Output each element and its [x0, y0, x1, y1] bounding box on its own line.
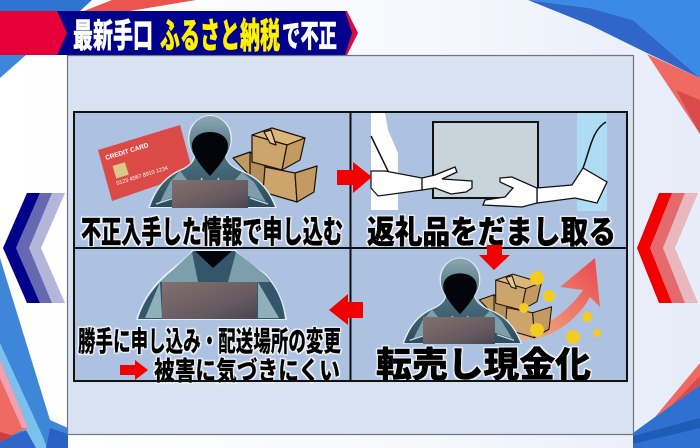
laptop (blurred): [423, 317, 495, 344]
icon: credit card: CREDIT CARD: [105, 142, 150, 162]
caption: 不正入手した情報で申し込む: [81, 215, 343, 250]
icon: yen coins: [519, 271, 601, 344]
background shapes: top right: [528, 0, 700, 134]
inline red arrow: [120, 360, 148, 380]
flow arrow: down: [479, 245, 510, 270]
icon: cardboard boxes: [233, 128, 317, 202]
caption: 転売し現金化: [376, 346, 591, 385]
icon: credit card: 0123 4567 8910 1234: [116, 166, 169, 187]
caption: 返礼品をだまし取る: [367, 214, 616, 250]
icon: cardboard boxes: [479, 274, 552, 338]
title text: yellow part: ふるさと納税: [160, 17, 280, 56]
background shapes: bottom right: [633, 363, 700, 448]
cell 4: unauthorized changes: [78, 250, 341, 386]
flow arrow: right: [337, 162, 372, 193]
cell 1: fraudulent application: [81, 115, 343, 250]
icon: hooded hacker: [148, 115, 277, 208]
title banner: [0, 11, 358, 56]
cell 2: trick return gift: [367, 113, 616, 250]
background shapes: bottom left: [0, 258, 68, 448]
left chevrons: [3, 193, 65, 303]
title text: end part: で不正: [282, 19, 337, 54]
cell 3: resale for cash: [376, 258, 601, 385]
laptop (blurred): [172, 180, 248, 208]
flow arrow: left: [329, 294, 363, 325]
icon: rising red arrow: [518, 258, 600, 339]
background shapes: top left: [0, 0, 196, 78]
laptop (blurred): [162, 282, 257, 319]
icon: hacker body: [136, 250, 287, 320]
title text: white part: 最新手口: [73, 17, 153, 54]
caption line 1: 勝手に申し込み・配送場所の変更: [78, 326, 341, 357]
caption line 2: 被害に気づきにくい: [154, 356, 340, 386]
illustration: parcel handover: [371, 113, 607, 211]
flow grid: [74, 112, 627, 386]
right chevrons: [637, 193, 698, 303]
main panel: [68, 56, 634, 434]
grid lines: [74, 112, 627, 381]
icon: hooded hacker: [402, 258, 522, 344]
icon: credit card: [98, 125, 193, 201]
